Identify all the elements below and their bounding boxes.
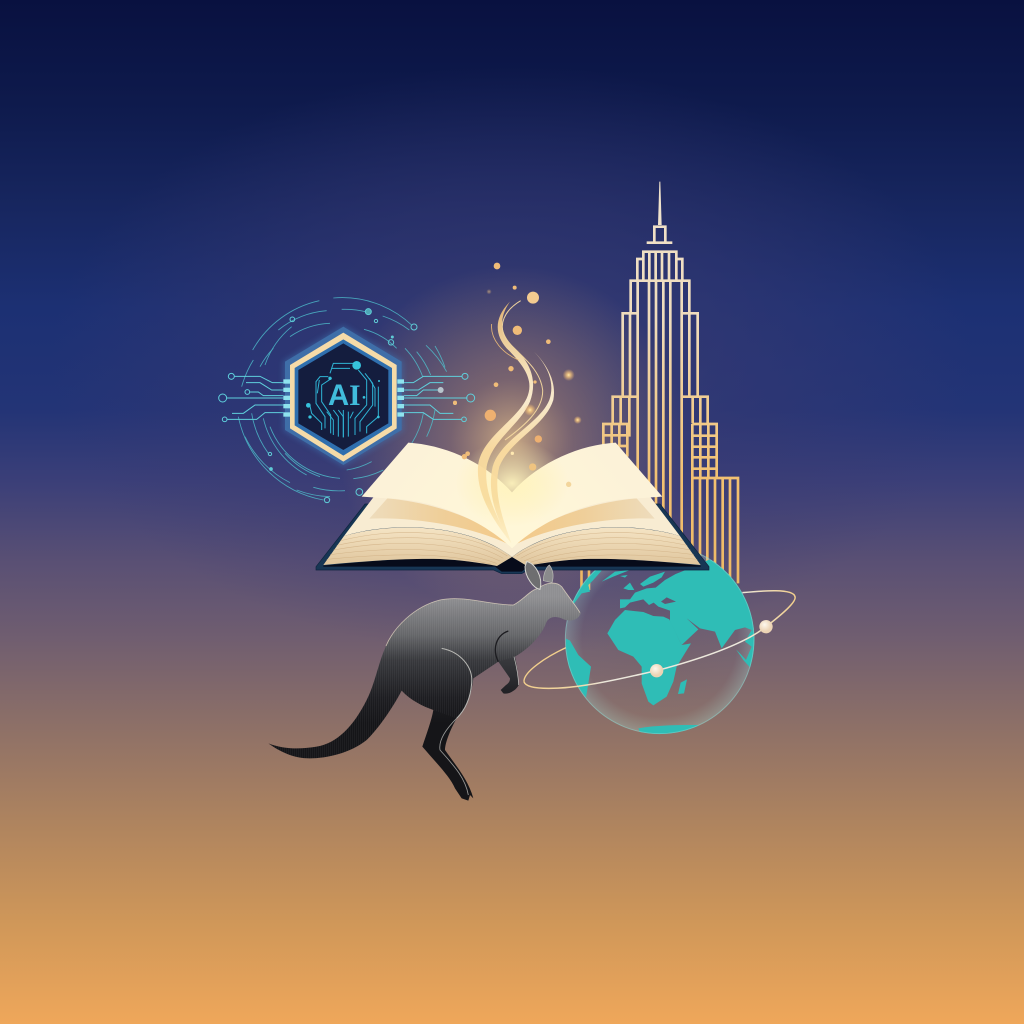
circuit nodes	[268, 309, 417, 503]
upper tier	[637, 252, 682, 280]
circuit rings	[238, 298, 447, 500]
crown box	[647, 227, 672, 243]
inner circuit dots	[306, 361, 380, 419]
orbit front	[524, 591, 795, 688]
left page block	[323, 443, 512, 566]
kangaroo	[268, 562, 581, 801]
left circuit traces	[219, 373, 283, 422]
AI label: AI	[328, 379, 361, 412]
far ear	[543, 565, 553, 583]
greenland	[602, 570, 630, 582]
window grid right	[692, 424, 717, 550]
AI chip emblem	[219, 298, 475, 503]
right page block	[512, 443, 701, 566]
right circuit traces	[404, 373, 475, 422]
rising ribbons	[478, 301, 554, 543]
shaft	[631, 281, 689, 570]
sparks	[453, 263, 571, 487]
near ear	[525, 562, 541, 589]
kangaroo body	[268, 583, 581, 801]
orbit bead right	[759, 620, 773, 633]
orbit back	[524, 648, 566, 682]
africa	[607, 610, 691, 705]
continents	[572, 560, 763, 740]
globe sphere	[565, 545, 754, 734]
spine shadow	[323, 557, 701, 572]
skyscraper	[603, 182, 738, 583]
madagascar	[678, 679, 687, 694]
skyscraper left base stubs	[582, 565, 589, 590]
right annex tower	[692, 478, 738, 583]
antarctica	[638, 725, 698, 734]
connector pads	[283, 379, 404, 417]
scandinavia	[640, 572, 665, 587]
middle setback	[623, 313, 698, 397]
north america	[573, 570, 602, 604]
glowing sparkles	[486, 289, 582, 424]
page centre glow	[455, 440, 569, 527]
warm glow behind book	[337, 265, 687, 615]
book cover	[316, 504, 709, 574]
back outline highlight	[386, 583, 580, 646]
inner circuit traces	[310, 363, 378, 437]
fur texture	[268, 583, 581, 758]
haunch and limb lines	[440, 631, 519, 795]
lower setback	[613, 397, 708, 437]
iceland	[620, 575, 628, 578]
eurasia	[620, 560, 763, 648]
spire	[658, 182, 662, 225]
window grid left	[603, 424, 628, 457]
south america	[566, 639, 591, 698]
globe rim	[565, 545, 754, 734]
globe with orbit	[524, 545, 795, 740]
hexagon chip	[283, 325, 403, 467]
open book	[316, 263, 709, 574]
australasia	[736, 630, 754, 668]
british isles	[623, 583, 634, 590]
orbit bead left	[650, 664, 663, 677]
